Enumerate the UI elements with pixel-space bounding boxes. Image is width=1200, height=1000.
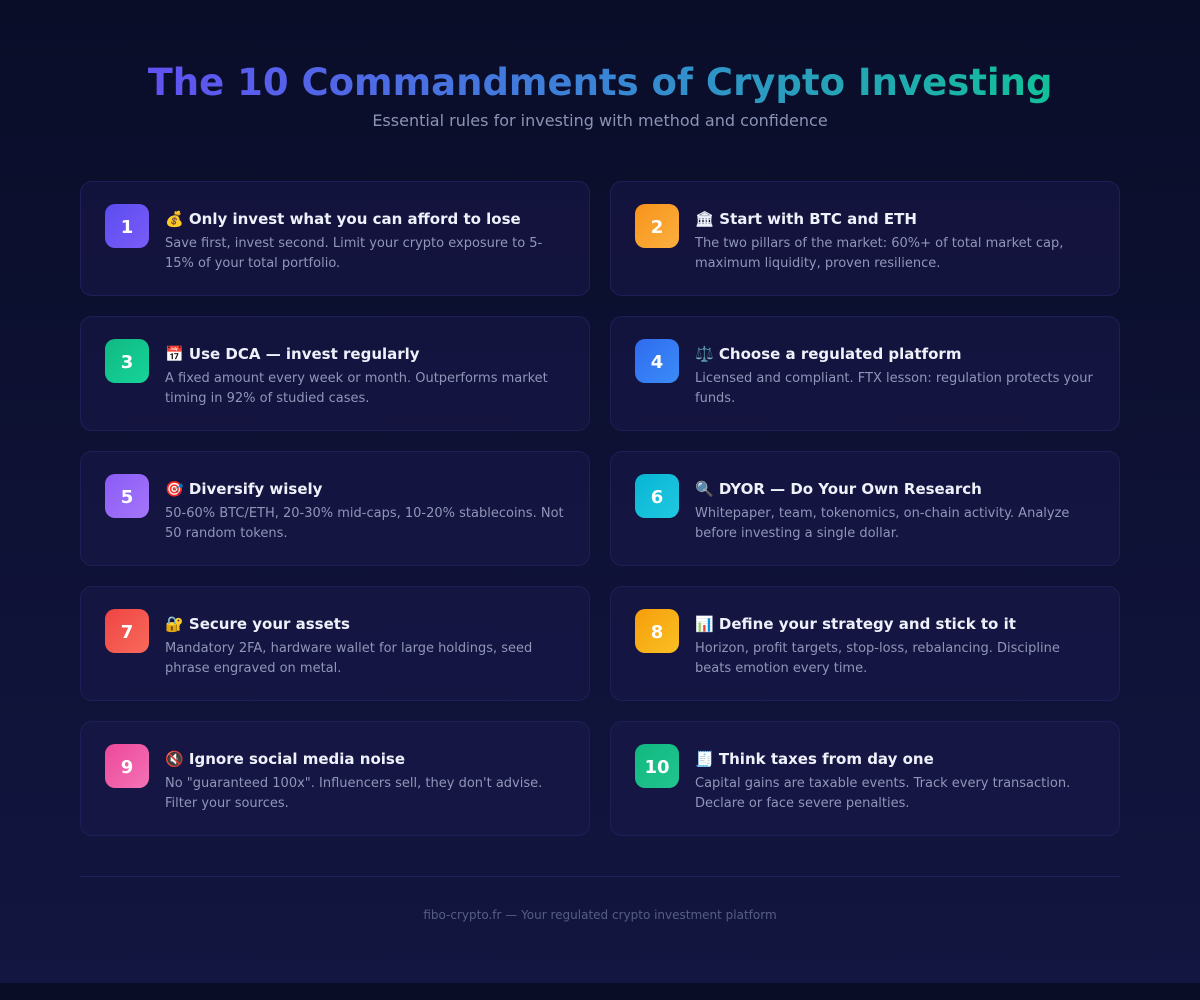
card 2 — [610, 181, 1120, 296]
text 6: Whitepaper, team, tokenomics, on-chain activity. Analyze before investing a single dollar. — [695, 506, 1069, 541]
badge 9 — [105, 744, 149, 788]
heading 1: 💰 Only invest what you can afford to lose — [165, 210, 521, 228]
card 10 — [610, 721, 1120, 836]
badge 4 — [635, 339, 679, 383]
heading 9: 🔇 Ignore social media noise — [165, 750, 405, 768]
text 5: 50-60% BTC/ETH, 20-30% mid-caps, 10-20% stablecoins. Not 50 random tokens. — [165, 506, 564, 541]
badge 4: 4 — [651, 352, 663, 373]
text 1: Save first, invest second. Limit your crypto exposure to 5-15% of your total portfolio. — [165, 236, 542, 271]
card 6 — [610, 451, 1120, 566]
text 9: No "guaranteed 100x". Influencers sell, they don't advise. Filter your sources. — [165, 776, 542, 811]
heading 2: 🏛 Start with BTC and ETH — [695, 210, 917, 228]
card 3 — [80, 316, 590, 431]
heading 4: ⚖️ Choose a regulated platform — [695, 345, 961, 363]
badge 1: 1 — [121, 217, 133, 238]
badge 6 — [635, 474, 679, 518]
badge 9: 9 — [121, 757, 133, 778]
text 3: A fixed amount every week or month. Outperforms market timing in 92% of studied cases. — [165, 371, 548, 406]
badge 2 — [635, 204, 679, 248]
footer: fibo-crypto.fr — Your regulated crypto investment platform — [423, 908, 777, 922]
heading 7: 🔐 Secure your assets — [165, 615, 350, 633]
badge 3: 3 — [121, 352, 133, 373]
badge 10 — [635, 744, 679, 788]
badge 7 — [105, 609, 149, 653]
card 8 — [610, 586, 1120, 701]
text 10: Capital gains are taxable events. Track every transaction. Declare or face severe penalties. — [695, 776, 1070, 811]
text 7: Mandatory 2FA, hardware wallet for large holdings, seed phrase engraved on metal. — [165, 641, 532, 676]
card 9 — [80, 721, 590, 836]
title: The 10 Commandments of Crypto Investing — [148, 61, 1052, 104]
badge 7: 7 — [121, 622, 133, 643]
badge 5: 5 — [121, 487, 133, 508]
card 7 — [80, 586, 590, 701]
text 8: Horizon, profit targets, stop-loss, rebalancing. Discipline beats emotion every time. — [695, 641, 1060, 676]
card 1 — [80, 181, 590, 296]
badge 10: 10 — [644, 757, 670, 778]
subtitle: Essential rules for investing with method and confidence — [372, 111, 828, 130]
badge 8: 8 — [651, 622, 663, 643]
badge 8 — [635, 609, 679, 653]
heading 8: 📊 Define your strategy and stick to it — [695, 615, 1016, 633]
badge 1 — [105, 204, 149, 248]
heading 6: 🔍 DYOR — Do Your Own Research — [695, 480, 982, 498]
card 5 — [80, 451, 590, 566]
text 4: Licensed and compliant. FTX lesson: regulation protects your funds. — [695, 371, 1093, 406]
badge 5 — [105, 474, 149, 518]
badge 3 — [105, 339, 149, 383]
heading 3: 📅 Use DCA — invest regularly — [165, 345, 420, 363]
card 4 — [610, 316, 1120, 431]
badge 2: 2 — [651, 217, 663, 238]
text 2: The two pillars of the market: 60%+ of total market cap, maximum liquidity, proven resilience. — [695, 236, 1063, 271]
heading 10: 🧾 Think taxes from day one — [695, 750, 934, 768]
badge 6: 6 — [651, 487, 663, 508]
heading 5: 🎯 Diversify wisely — [165, 480, 322, 498]
